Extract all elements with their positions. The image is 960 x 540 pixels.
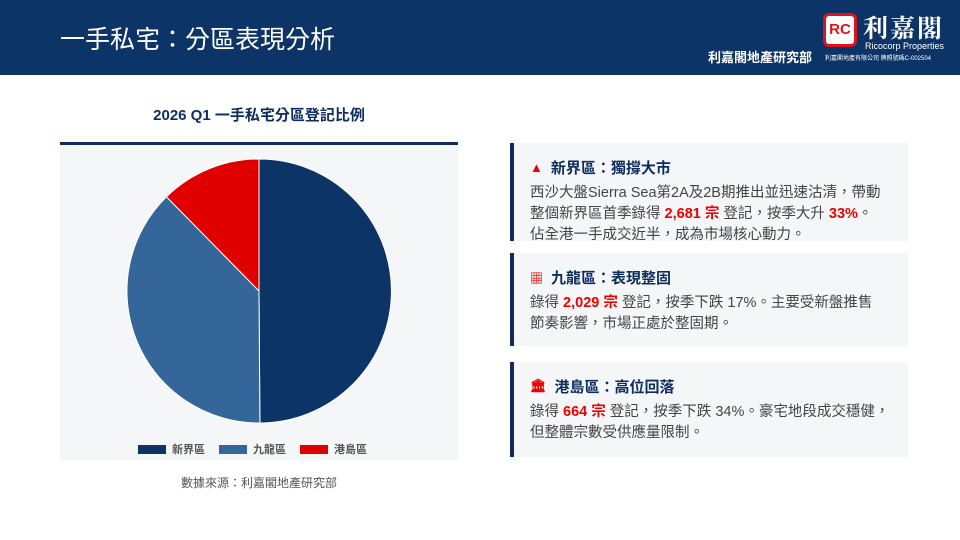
legend: 新界區 — [172, 444, 205, 456]
legend: 港島區 — [334, 444, 367, 456]
dept label: 利嘉閣地產研究部 — [708, 50, 812, 65]
panel: kowloon — [510, 253, 908, 346]
logo: 利嘉閣 — [863, 16, 944, 43]
panel: new territories: 西沙大盤Sierra Sea第2A及2B期推出並迅速沽清，帶動 — [530, 185, 880, 201]
panel: hk island: 🏛 — [530, 378, 547, 393]
legend — [138, 444, 367, 456]
logo: RC — [829, 21, 851, 38]
panel: kowloon: ▦ — [530, 270, 543, 286]
panel: kowloon: 錄得 2,029 宗 登記，按季下跌 17%。主要受新盤推售 — [530, 295, 872, 311]
chart panel — [60, 142, 458, 460]
panel: hk island — [510, 362, 908, 457]
panel: kowloon: 九龍區：表現整固 — [551, 270, 671, 286]
legend: 九龍區 — [253, 444, 286, 456]
panel: hk island: 港島區：高位回落 — [555, 378, 675, 396]
panel: new territories: 新界區：獨撐大市 — [551, 160, 671, 176]
panel: hk island: 錄得 664 宗 登記，按季下跌 34%。豪宅地段成交穩健， — [530, 404, 889, 420]
title: 一手私宅：分區表現分析 — [60, 20, 335, 56]
logo — [823, 13, 944, 62]
pie chart — [126, 158, 392, 424]
chart title: 2026 Q1 一手私宅分區登記比例 — [153, 107, 365, 124]
panel: new territories: 整個新界區首季錄得 2,681 宗 登記，按季大升 33%。 — [530, 206, 872, 222]
header bar — [0, 0, 960, 75]
panel: new territories: 佔全港一手成交近半，成為市場核心動力。 — [530, 227, 806, 243]
panel: new territories — [510, 143, 908, 241]
panel: kowloon: 節奏影響，市場正處於整固期。 — [530, 316, 733, 332]
logo: Ricocorp Properties — [865, 41, 944, 51]
panel: new territories: ▲ — [530, 160, 543, 174]
logo: 利嘉閣地產有限公司 牌照號碼C-002504 — [825, 56, 931, 62]
source: 數據來源：利嘉閣地產研究部 — [181, 476, 337, 490]
panel: hk island: 但整體宗數受供應量限制。 — [530, 425, 704, 441]
